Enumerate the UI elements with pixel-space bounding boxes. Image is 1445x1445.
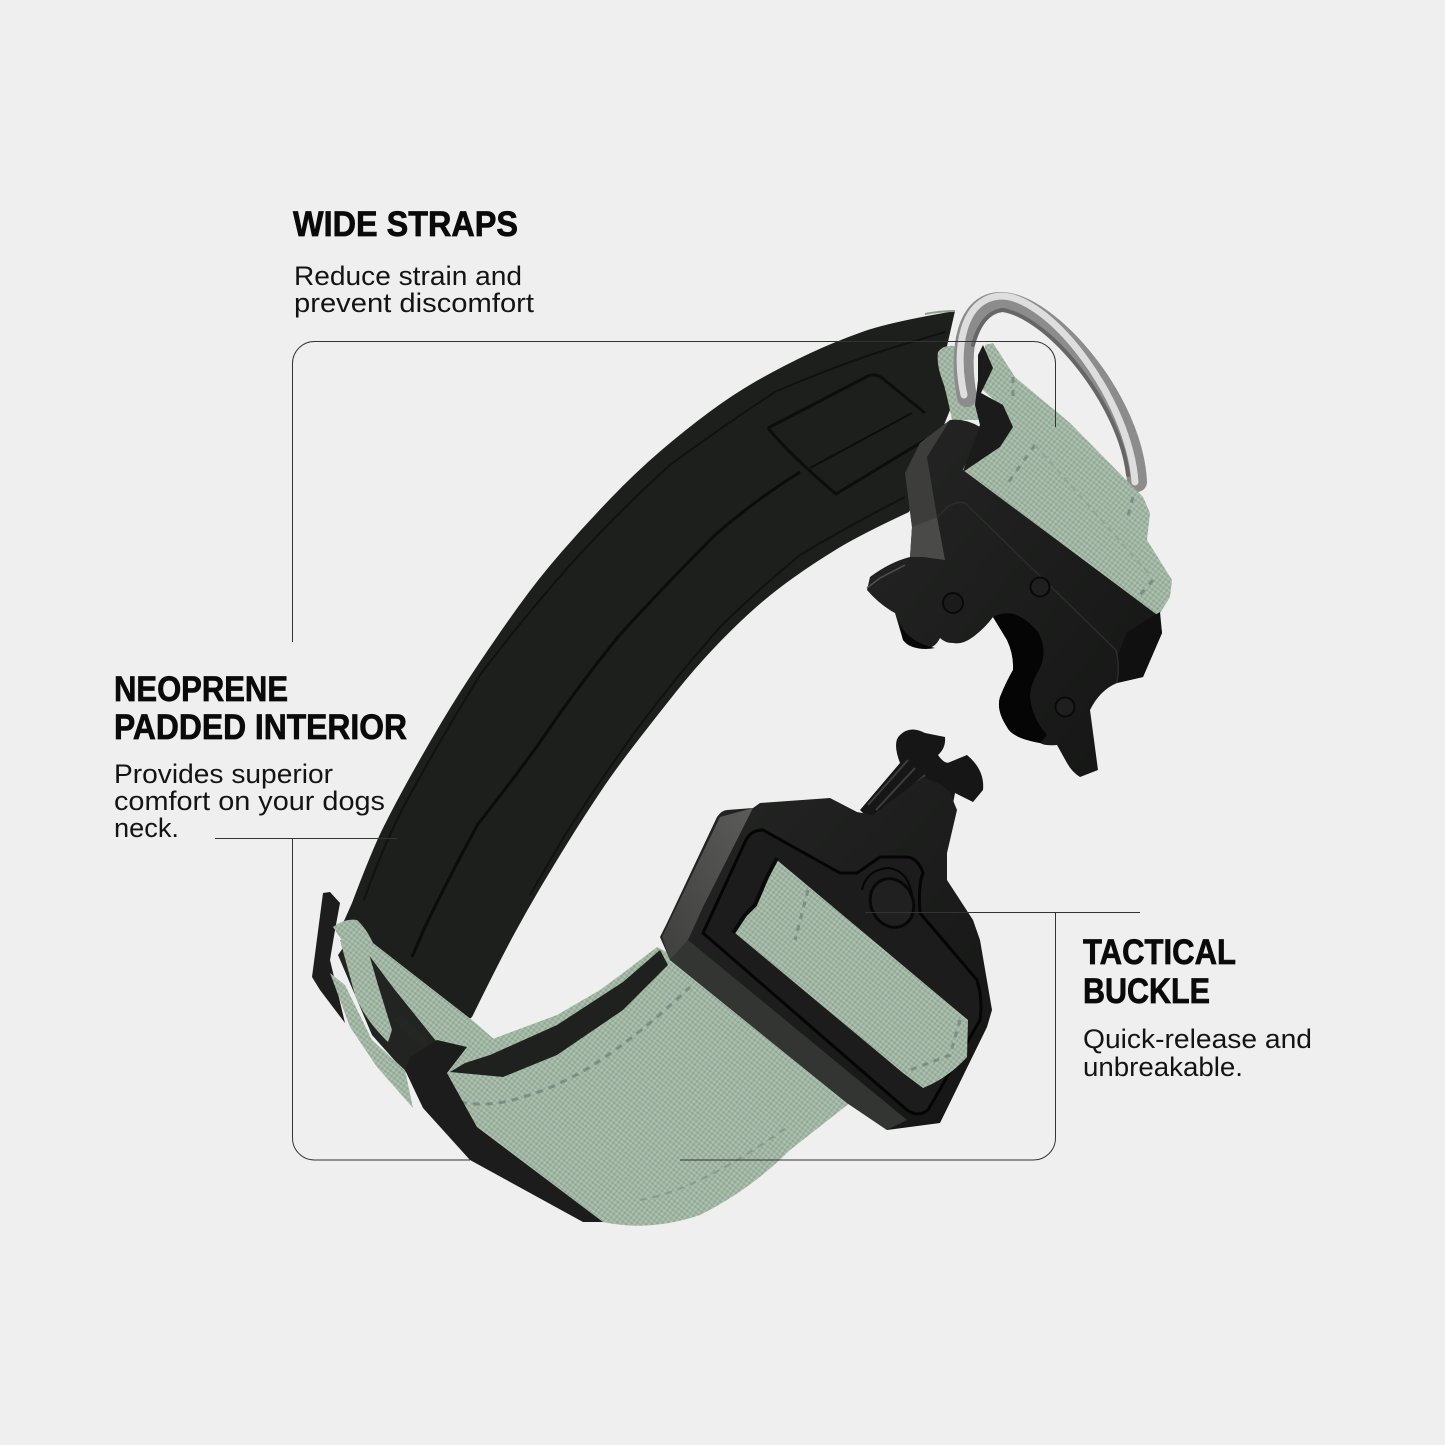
webbing bracket [312, 892, 345, 1023]
neoprene padded band [340, 311, 955, 1040]
callout: neoprene padded interior: PADDED INTERIOR [114, 708, 407, 747]
callout: tactical buckle: BUCKLE [1083, 972, 1210, 1011]
callout: wide straps [293, 205, 535, 318]
callout: wide straps: prevent discomfort [294, 288, 535, 318]
rear green strap scrap [938, 346, 985, 420]
callout: tactical buckle: Quick-release and [1083, 1024, 1312, 1054]
callout: neoprene padded interior: NEOPRENE [114, 670, 288, 709]
buckle body [660, 777, 992, 1130]
prong [860, 729, 983, 830]
callout: wide straps: WIDE STRAPS [293, 205, 518, 244]
upper green strap [963, 343, 1172, 632]
collar illustration [312, 296, 1172, 1226]
rivets [943, 593, 963, 613]
velcro patch [768, 375, 925, 494]
inner green tab [735, 860, 968, 1088]
rear folded green strap [330, 920, 495, 1108]
callout: neoprene padded interior: comfort on your dogs [114, 786, 385, 816]
callout: tactical buckle: TACTICAL [1083, 933, 1236, 972]
callout: neoprene padded interior [114, 670, 407, 843]
callout: tactical buckle: unbreakable. [1083, 1052, 1243, 1082]
lower buckle [660, 729, 992, 1130]
callout: tactical buckle [1083, 933, 1312, 1082]
callout: neoprene padded interior: neck. [114, 813, 179, 843]
strap fold [963, 345, 1013, 472]
callout: wide straps: Reduce strain and [294, 261, 522, 291]
keeper loop [405, 1040, 603, 1222]
callout bracket lines [215, 341, 1140, 1160]
main green strap [447, 947, 860, 1226]
D-ring [960, 296, 1137, 482]
upper buckle [867, 420, 1162, 777]
callout: neoprene padded interior: Provides superior [114, 759, 333, 789]
release button [862, 871, 922, 935]
